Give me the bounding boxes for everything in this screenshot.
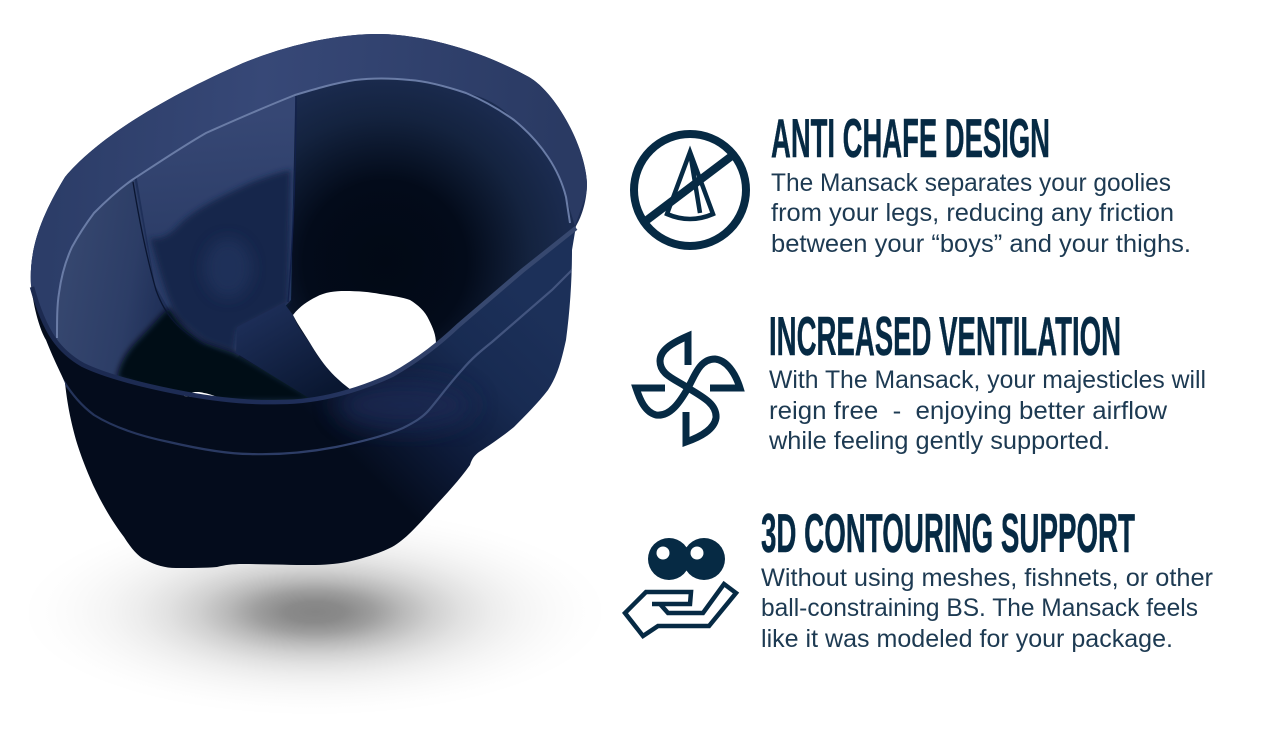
icon: hand holding two balls (625, 538, 736, 636)
feature: increased ventilation (636, 305, 1206, 455)
body text: The Mansack separates your goolies (771, 169, 1171, 197)
upper waistband (30, 32, 590, 340)
icon: pinwheel fan (636, 336, 740, 442)
body text: like it was modeled for your package. (761, 625, 1173, 653)
feature: anti chafe design (634, 107, 1191, 258)
pouch (150, 170, 291, 352)
body text: between your “boys” and your thighs. (771, 230, 1191, 258)
body text (768, 366, 1206, 455)
feature: 3D contouring support (625, 502, 1213, 653)
front rim edge (32, 228, 576, 402)
body text: With The Mansack, your majesticles will (769, 366, 1206, 394)
drop shadow (20, 507, 610, 717)
body text: while feeling gently supported. (768, 427, 1110, 455)
body text: from your legs, reducing any friction (771, 199, 1174, 227)
product photo: navy underwear with drop shadow (20, 32, 610, 717)
white leg opening left (184, 392, 222, 400)
icon: crossed-out sail (634, 134, 746, 246)
white leg opening right (293, 291, 436, 390)
body text (771, 169, 1191, 258)
garment outer front (31, 226, 576, 568)
seams (288, 95, 296, 302)
body text: ball-constraining BS. The Mansack feels (761, 594, 1198, 622)
front panel (137, 96, 296, 356)
left inner wall (30, 168, 149, 375)
body text: Without using meshes, fishnets, or other (761, 564, 1213, 592)
top seam line (57, 78, 570, 338)
body text (761, 564, 1213, 653)
body text: reign free - enjoying better airflow (769, 397, 1168, 425)
garment interior (20, 32, 590, 402)
gusset strip (236, 305, 341, 397)
lower-left dark area (117, 308, 315, 402)
